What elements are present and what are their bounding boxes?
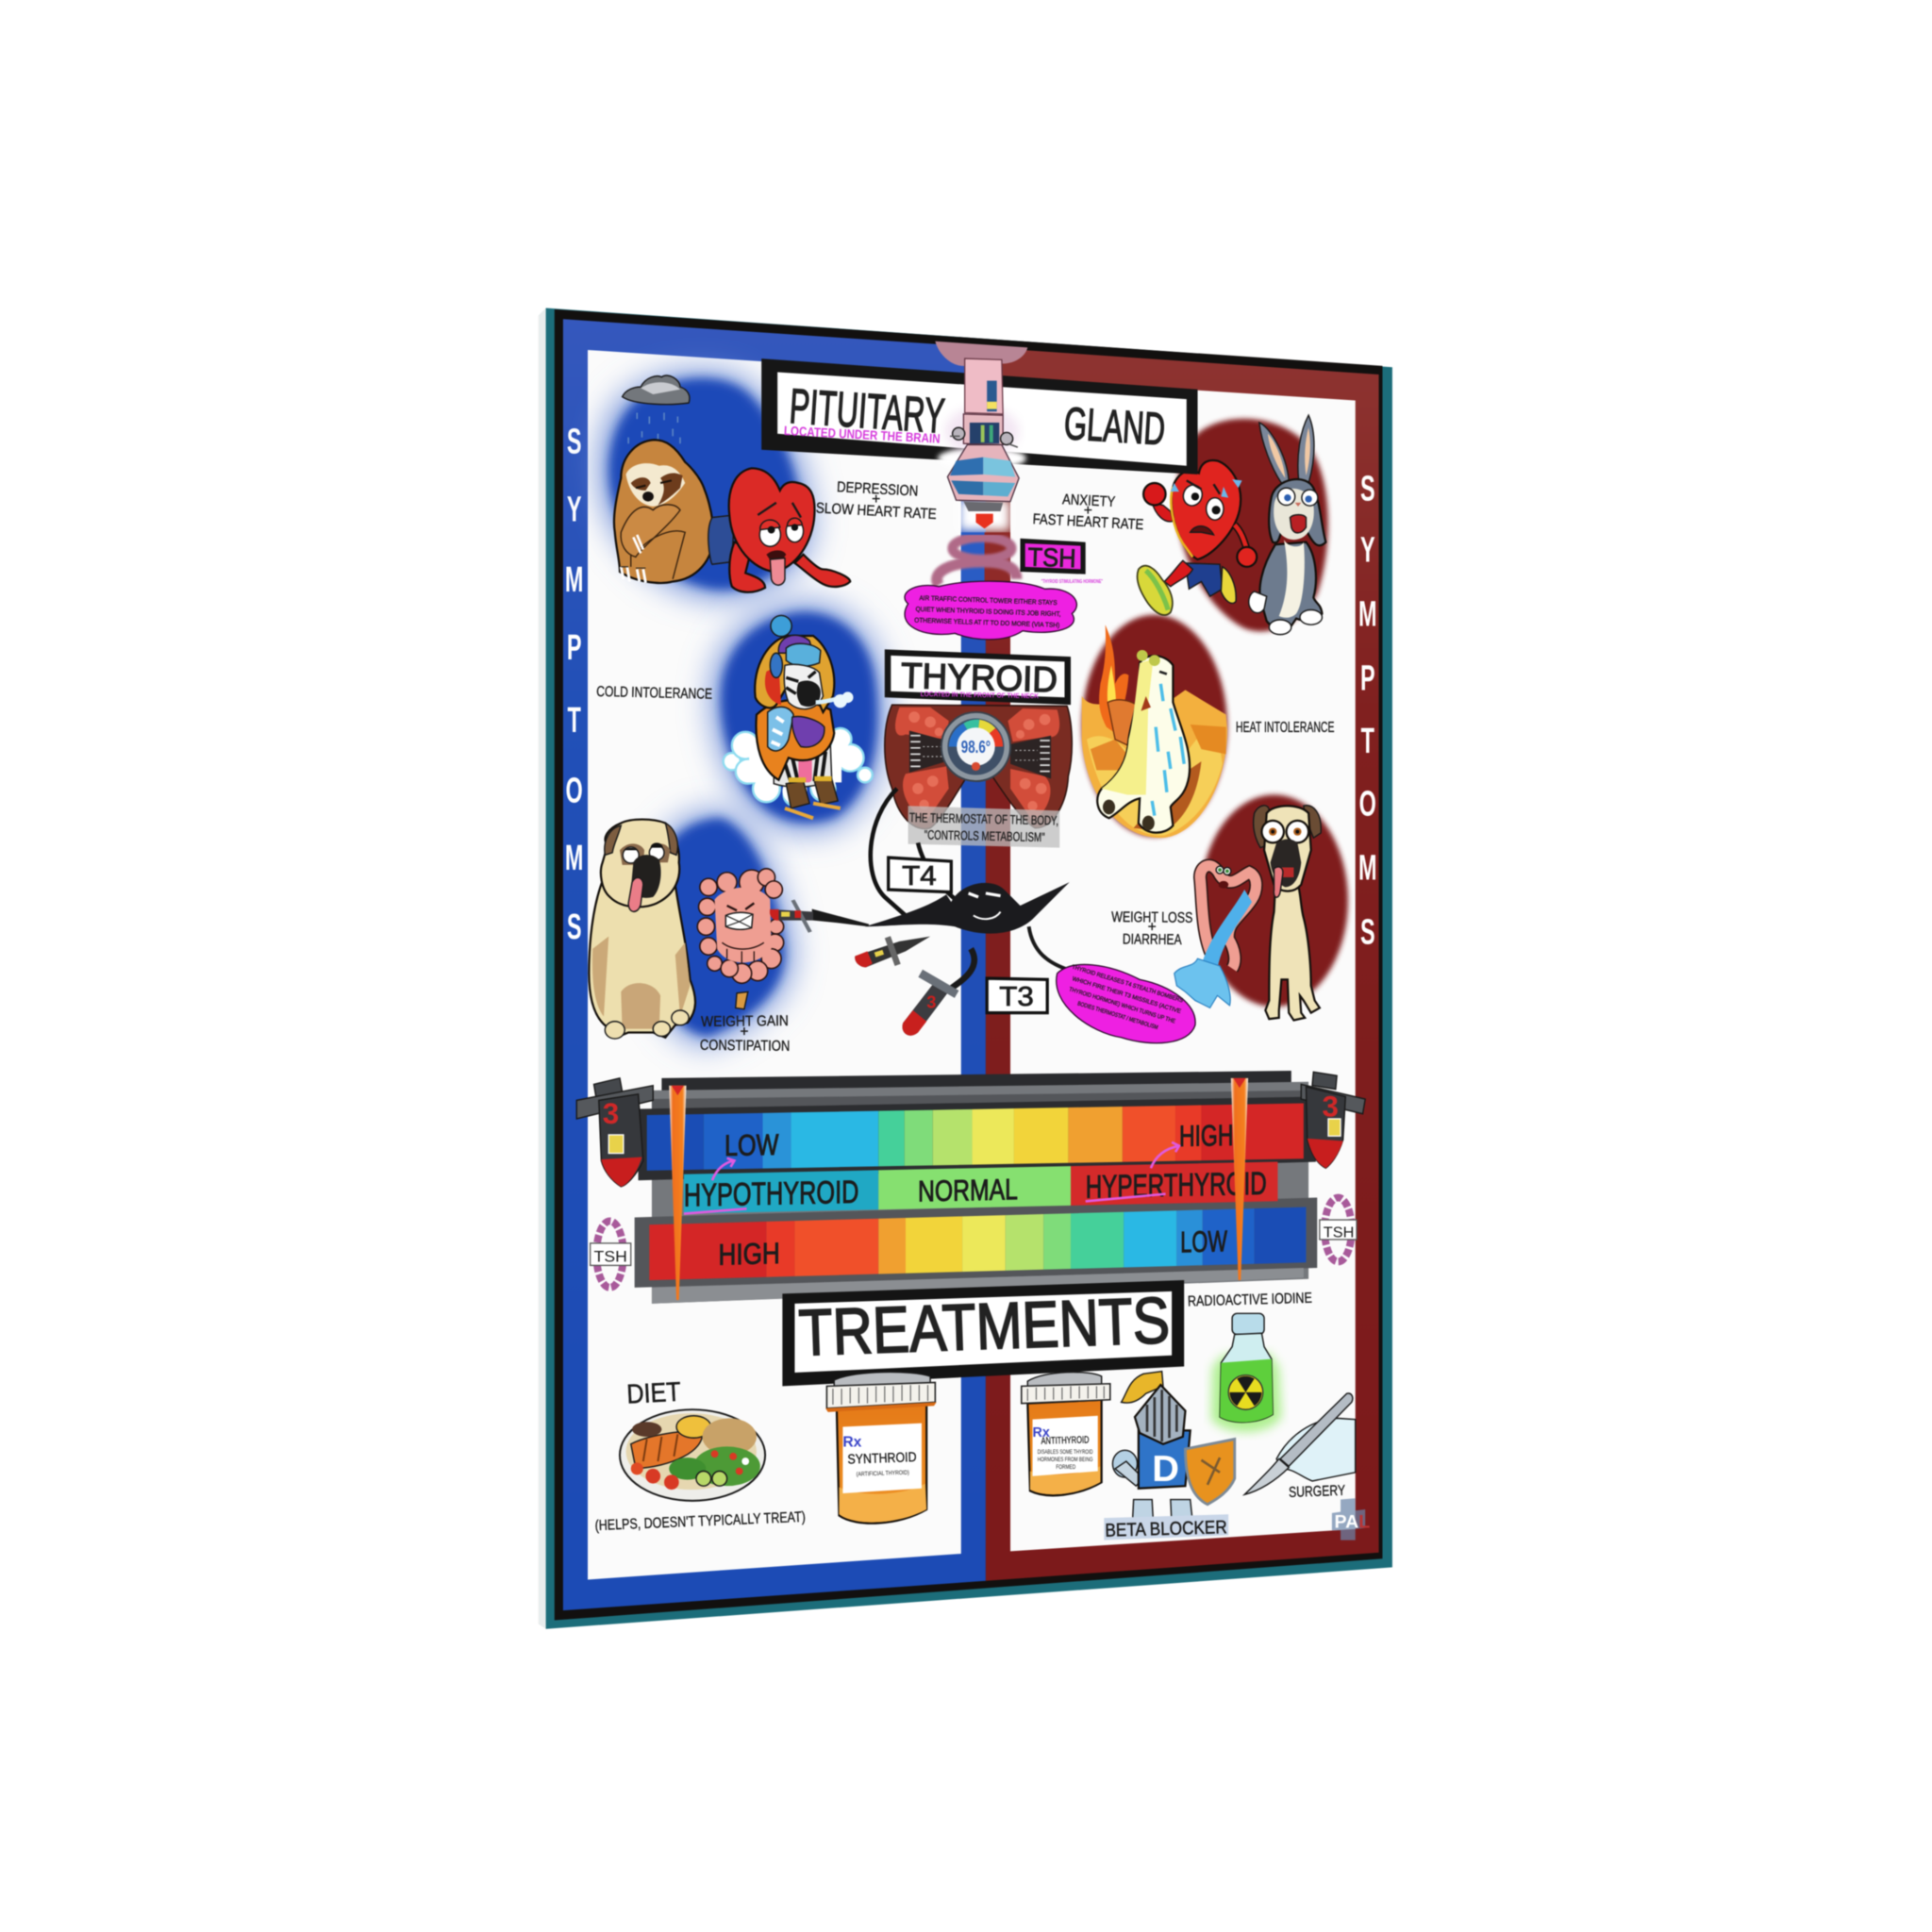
text: anxiety and fast heart rate bbox=[1032, 491, 1144, 533]
icon: zebra in winter coat bbox=[724, 615, 873, 818]
icon: anxious running heart bbox=[1138, 460, 1257, 615]
icon: air traffic control tower bbox=[935, 341, 1027, 531]
icon: antithyroid bottle bbox=[1022, 1373, 1110, 1495]
text box: thermostat of the body bbox=[908, 806, 1059, 848]
text: weight loss and diarrhea bbox=[1111, 909, 1192, 948]
title box: pituitary gland: LOCATED UNDER THE BRAIN bbox=[784, 424, 941, 446]
text: weight gain and constipation: WEIGHT GAIN bbox=[701, 1013, 789, 1030]
logo: PAL: PAL bbox=[1335, 1512, 1370, 1533]
text box: thermostat of the body: THE THERMOSTAT OF THE BODY, bbox=[909, 810, 1058, 827]
scale: hypo normal hyper strip bbox=[684, 1162, 1277, 1214]
text box: thermostat of the body: "CONTROLS METABOLISM" bbox=[924, 827, 1045, 844]
scale: thyroid hormone spectrum bbox=[647, 1104, 1304, 1171]
blue symptom glow shapes bbox=[600, 372, 885, 1045]
scale: TSH spectrum bbox=[649, 1207, 1306, 1280]
symptoms label right: Y bbox=[1360, 529, 1375, 570]
symptoms label right: T bbox=[1361, 720, 1374, 760]
icon: falling missile small bbox=[855, 936, 930, 967]
icon: TSH gear right: TSH bbox=[1324, 1224, 1354, 1241]
symptoms label right: S bbox=[1360, 467, 1375, 508]
icon: T3 missile right: 3 bbox=[1322, 1090, 1339, 1123]
thermometer bar frame bbox=[635, 1071, 1317, 1304]
icon: synthroid bottle: SYNTHROID bbox=[847, 1450, 917, 1468]
icon: antithyroid bottle: FORMED bbox=[1056, 1464, 1076, 1471]
symptoms label left: P bbox=[567, 626, 581, 667]
icon: rain cloud bbox=[623, 375, 690, 443]
callout: air traffic control: OTHERWISE YELLS AT IT TO DO MORE (VIA TSH) bbox=[914, 618, 1059, 629]
indicator needle right bbox=[1231, 1078, 1248, 1280]
icon: TSH gear left bbox=[591, 1221, 631, 1288]
icon: antithyroid bottle: Rx bbox=[1033, 1425, 1050, 1441]
text: anxiety and fast heart rate: FAST HEART RATE bbox=[1032, 511, 1144, 533]
icon: sloth bbox=[614, 440, 713, 583]
symptoms label right bbox=[1358, 467, 1377, 952]
text: surgery: SURGERY bbox=[1289, 1483, 1346, 1501]
icon: stealth bomber bbox=[865, 882, 1070, 934]
icon: diarrhea intestine with water bbox=[1174, 866, 1257, 1008]
scale: hypo normal hyper strip: HYPERTHYROID bbox=[1086, 1166, 1267, 1206]
poster frame bbox=[539, 308, 1392, 1629]
callout: stealth bombers and T3: THYROID HORMONE) WHICH TURNS UP THE bbox=[1068, 986, 1176, 1024]
icon: sad pug bbox=[589, 820, 695, 1039]
text: helps, doesn't typically treat: (HELPS, DOESN'T TYPICALLY TREAT) bbox=[594, 1509, 806, 1534]
icon: falling missile large: 3 bbox=[926, 991, 936, 1011]
indicator needle left bbox=[669, 1086, 687, 1300]
label: T3 bbox=[987, 978, 1047, 1013]
callout: stealth bombers and T3: BODIES THERMOSTAT / METABOLISM bbox=[1076, 1000, 1158, 1031]
icon: antithyroid bottle: HORMONES FROM BEING bbox=[1038, 1457, 1093, 1463]
label: T3: T3 bbox=[999, 982, 1034, 1012]
text: weight loss and diarrhea: WEIGHT LOSS bbox=[1111, 909, 1192, 926]
arrows: hypo and hyper prefix marks bbox=[684, 1142, 1179, 1214]
label: T4: T4 bbox=[902, 861, 937, 891]
symptoms label left: M bbox=[565, 558, 583, 599]
symptoms label left: M bbox=[565, 837, 583, 878]
icon: plate of food bbox=[620, 1409, 765, 1501]
callout: air traffic control: QUIET WHEN THYROID IS DOING ITS JOB RIGHT, bbox=[915, 607, 1061, 618]
text: depression and slow heart rate: + bbox=[872, 491, 880, 508]
heading box: thyroid: THYROID bbox=[901, 657, 1058, 700]
text: depression and slow heart rate: SLOW HEART RATE bbox=[815, 500, 937, 523]
text: anxiety and fast heart rate: ANXIETY bbox=[1062, 491, 1116, 510]
label: T4 bbox=[889, 858, 951, 892]
title box: pituitary gland bbox=[761, 358, 1198, 475]
logo: PAL bbox=[1332, 1498, 1370, 1541]
heading box: thyroid: LOCATED IN THE FRONT OF THE NECK bbox=[921, 691, 1040, 700]
icon: T3 missile right bbox=[1301, 1072, 1365, 1168]
text: weight gain and constipation: CONSTIPATION bbox=[700, 1038, 790, 1055]
icon: TSH signal rings bbox=[937, 532, 1017, 588]
scale: thyroid hormone spectrum: LOW bbox=[724, 1128, 779, 1162]
icon: synthroid bottle: Rx bbox=[842, 1434, 862, 1450]
heading box: thyroid bbox=[885, 649, 1071, 705]
icon: TSH gear right bbox=[1320, 1198, 1357, 1261]
icon: scared rabbit bbox=[1249, 415, 1325, 635]
icon: tired heart bbox=[708, 468, 850, 592]
red symptom shapes bbox=[1082, 419, 1348, 1007]
symptoms label right: M bbox=[1358, 593, 1377, 634]
callout: air traffic control bbox=[905, 581, 1076, 640]
symptoms label left bbox=[565, 421, 583, 947]
symptoms label left: Y bbox=[567, 489, 581, 529]
symptoms label left: S bbox=[567, 906, 581, 947]
icon: falling missile large bbox=[903, 949, 974, 1036]
symptoms label left: O bbox=[566, 769, 583, 810]
icon: radioactive iodine bottle bbox=[1211, 1313, 1281, 1432]
icon: TSH gear left: TSH bbox=[594, 1248, 627, 1265]
symptoms label right: P bbox=[1360, 658, 1375, 698]
title box: pituitary gland: PITUITARY bbox=[788, 379, 946, 444]
text: cold intolerance: COLD INTOLERANCE bbox=[596, 684, 712, 703]
text: depression and slow heart rate bbox=[815, 479, 937, 523]
icon: beta blocker knight bbox=[1112, 1372, 1235, 1525]
symptoms label left: T bbox=[567, 699, 581, 740]
icon: antithyroid bottle: DISABLES SOME THYROID bbox=[1038, 1449, 1093, 1456]
scale: hypo normal hyper strip: HYPOTHYROID bbox=[684, 1174, 858, 1214]
label: TSH bbox=[1020, 539, 1103, 585]
text: weight loss and diarrhea: + bbox=[1148, 919, 1157, 935]
label: TSH: TSH bbox=[1027, 542, 1076, 573]
icon: beta blocker knight: D bbox=[1152, 1449, 1179, 1490]
label: beta blocker: BETA BLOCKER bbox=[1105, 1517, 1227, 1541]
icon: thyroid gland with thermostat bbox=[885, 705, 1072, 829]
icon: synthroid bottle: (ARTIFICIAL THYROID) bbox=[857, 1470, 909, 1478]
callout: stealth bombers and T3: WHICH FIRE THEIR T3 MISSILES (ACTIVE bbox=[1072, 975, 1182, 1015]
icon: constipated intestine bbox=[697, 869, 784, 1009]
text: weight gain and constipation bbox=[700, 1013, 790, 1055]
arrow: T4 curved line from thyroid bbox=[871, 789, 958, 917]
text: radioactive iodine: RADIOACTIVE IODINE bbox=[1188, 1291, 1312, 1309]
text: anxiety and fast heart rate: + bbox=[1084, 503, 1092, 519]
text: depression and slow heart rate: DEPRESSION bbox=[837, 479, 919, 500]
symptoms label right: S bbox=[1360, 911, 1375, 952]
scale: hypo normal hyper strip: NORMAL bbox=[918, 1173, 1018, 1208]
symptoms label left: S bbox=[567, 421, 581, 461]
heading box: treatments: TREATMENTS bbox=[797, 1283, 1171, 1370]
scale: TSH spectrum: HIGH bbox=[718, 1237, 780, 1272]
arrow: bomber smoke trail to intestine bbox=[813, 910, 869, 925]
symptoms label right: O bbox=[1359, 783, 1376, 824]
icon: synthroid bottle bbox=[825, 1372, 937, 1524]
callout: stealth bombers and T3 bbox=[1057, 964, 1195, 1043]
icon: missile to intestine bbox=[770, 899, 813, 933]
icon: anxious pug bbox=[1254, 806, 1321, 1020]
callout: air traffic control: AIR TRAFFIC CONTROL TOWER EITHER STAYS bbox=[919, 595, 1058, 607]
scale: thyroid hormone spectrum: HIGH bbox=[1179, 1119, 1233, 1153]
icon: antithyroid bottle: ANTITHYROID bbox=[1041, 1435, 1090, 1447]
icon: scalpel in gloved hand bbox=[1244, 1393, 1356, 1494]
text: diet: DIET bbox=[626, 1377, 682, 1410]
text: weight loss and diarrhea: DIARRHEA bbox=[1123, 931, 1182, 948]
icon: heated polar bear in desert bbox=[1082, 625, 1227, 838]
title box: pituitary gland: GLAND bbox=[1063, 398, 1167, 455]
callout: stealth bombers and T3: THYROID RELEASES T4 STEALTH BOMBERS bbox=[1071, 964, 1184, 1004]
label: TSH: "THYROID STIMULATING HORMONE" bbox=[1041, 579, 1103, 585]
icon: thyroid gland with thermostat: 98.6° bbox=[961, 737, 991, 757]
text: heat intolerance: HEAT INTOLERANCE bbox=[1236, 720, 1335, 736]
symptoms label right: M bbox=[1358, 847, 1377, 888]
icon: T3 missile left: 3 bbox=[603, 1097, 619, 1130]
text: weight gain and constipation: + bbox=[740, 1024, 748, 1040]
scale: TSH spectrum: LOW bbox=[1180, 1224, 1227, 1258]
arrow: T3 trail bbox=[1029, 926, 1072, 971]
icon: T3 missile left bbox=[576, 1078, 653, 1187]
